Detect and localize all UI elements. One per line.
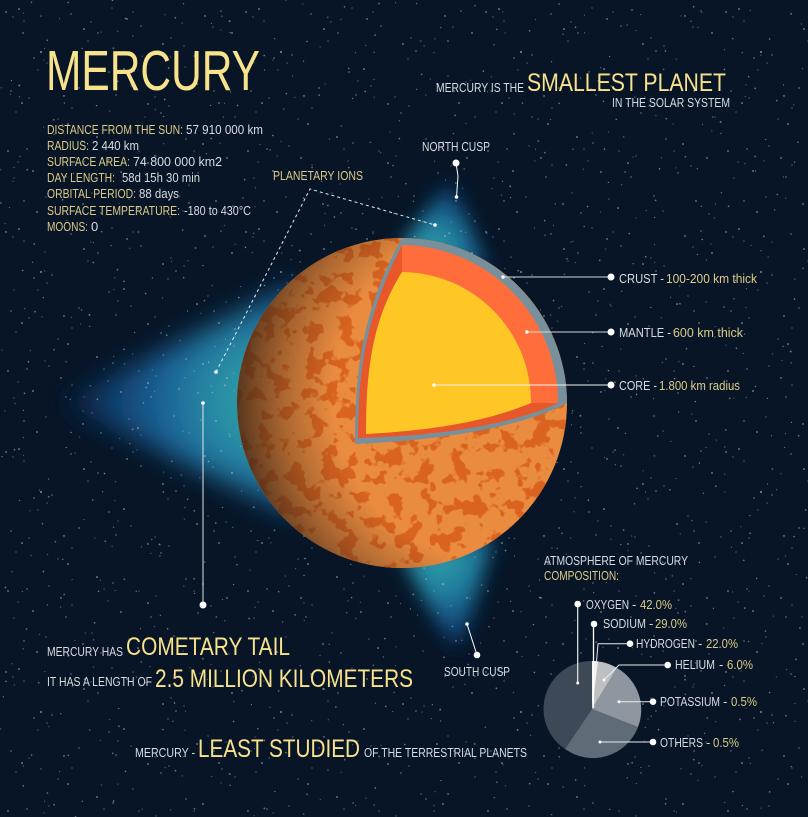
planetary ion glow: left bbox=[60, 282, 300, 518]
helium label: - bbox=[719, 657, 723, 672]
atmosphere heading: COMPOSITION: bbox=[544, 568, 619, 583]
surface area bbox=[47, 154, 222, 169]
radius: RADIUS: bbox=[47, 138, 89, 153]
helium leader bbox=[602, 662, 671, 682]
others leader bbox=[598, 739, 656, 745]
surface area: SURFACE AREA: bbox=[47, 154, 130, 169]
atmosphere heading bbox=[544, 553, 688, 583]
north cusp pointer bbox=[452, 160, 460, 199]
slice: hydrogen bbox=[592, 668, 641, 727]
helium label: 6.0% bbox=[727, 657, 753, 672]
hydrogen label: 22.0% bbox=[706, 636, 738, 651]
crust label: CRUST - bbox=[619, 271, 664, 286]
distance: 57 910 000 km bbox=[186, 122, 263, 137]
headline: smallest planet: MERCURY IS THE bbox=[436, 80, 524, 95]
moons: 0 bbox=[91, 219, 98, 234]
planetary ion glow: top bbox=[398, 178, 490, 272]
hydrogen leader bbox=[596, 640, 633, 668]
core label: CORE - bbox=[619, 378, 657, 393]
oxygen label: OXYGEN bbox=[586, 597, 629, 612]
helium label: HELIUM bbox=[675, 657, 715, 672]
others label: - bbox=[706, 735, 710, 750]
headline: smallest planet: SMALLEST PLANET bbox=[527, 69, 726, 97]
day length bbox=[47, 170, 200, 185]
others label: OTHERS bbox=[660, 735, 703, 750]
others label bbox=[660, 735, 739, 750]
least studied headline: LEAST STUDIED bbox=[198, 735, 360, 763]
oxygen label: 42.0% bbox=[640, 597, 672, 612]
planetary ion glow: bottom bbox=[400, 535, 495, 660]
helium label bbox=[675, 657, 753, 672]
potassium label: POTASSIUM bbox=[660, 694, 720, 709]
headline: smallest planet bbox=[436, 69, 730, 110]
mantle label: 600 km thick bbox=[673, 325, 743, 340]
core label bbox=[619, 378, 740, 393]
headline: smallest planet: IN THE SOLAR SYSTEM bbox=[612, 96, 730, 110]
crust pointer bbox=[501, 274, 614, 280]
distance: DISTANCE FROM THE SUN: bbox=[47, 122, 183, 137]
slice: trace gas sliver bbox=[592, 661, 598, 709]
radius: 2 440 km bbox=[92, 138, 139, 153]
others label: 0.5% bbox=[713, 735, 739, 750]
south cusp label: SOUTH CUSP bbox=[444, 664, 510, 679]
surface pattern bbox=[237, 238, 567, 568]
core pointer bbox=[432, 382, 614, 388]
sodium label: - bbox=[649, 616, 653, 631]
potassium label: - bbox=[723, 694, 727, 709]
comet tail headline: MERCURY HAS bbox=[47, 644, 123, 659]
oxygen label bbox=[586, 597, 672, 612]
surface temperature: -180 to 430°C bbox=[184, 203, 251, 218]
sodium leader bbox=[591, 621, 597, 708]
mantle label: MANTLE - bbox=[619, 325, 671, 340]
moons: MOONS: bbox=[47, 219, 88, 234]
planet shading bbox=[237, 238, 567, 568]
cutaway: mantle bbox=[402, 245, 558, 403]
north cusp label: NORTH CUSP bbox=[422, 139, 490, 154]
crust label: 100-200 km thick bbox=[666, 271, 757, 286]
orbital period: ORBITAL PERIOD: bbox=[47, 186, 136, 201]
sodium label: SODIUM bbox=[603, 616, 646, 631]
slice: helium bbox=[592, 661, 617, 709]
comet tail pointer bbox=[200, 401, 206, 608]
atmosphere heading: ATMOSPHERE OF MERCURY bbox=[544, 553, 688, 568]
least studied headline bbox=[135, 735, 527, 763]
radius bbox=[47, 138, 139, 153]
title: MERCURY bbox=[46, 39, 260, 103]
least studied headline: MERCURY - bbox=[135, 745, 195, 760]
sodium label: 29.0% bbox=[655, 616, 687, 631]
planet bbox=[237, 238, 567, 568]
potassium leader bbox=[618, 698, 656, 705]
hydrogen label: - bbox=[698, 636, 702, 651]
comet tail headline: IT HAS A LENGTH OF bbox=[47, 674, 152, 689]
cutaway: core bbox=[366, 272, 531, 434]
oxygen label: - bbox=[632, 597, 636, 612]
core label: 1.800 km radius bbox=[659, 378, 740, 393]
mantle pointer bbox=[525, 328, 614, 336]
orbital period: 88 days bbox=[139, 186, 179, 201]
sodium label bbox=[603, 616, 687, 631]
slice: sodium bbox=[565, 709, 638, 758]
crust label bbox=[619, 271, 757, 286]
planet facts bbox=[47, 122, 263, 234]
day length: DAY LENGTH: bbox=[47, 170, 115, 185]
cutaway: crust bbox=[355, 238, 567, 444]
comet tail headline: COMETARY TAIL bbox=[126, 633, 290, 661]
south cusp pointer bbox=[465, 622, 480, 658]
comet tail headline bbox=[47, 633, 413, 693]
atmosphere pie chart bbox=[544, 661, 641, 758]
cutaway: mantle shadow bbox=[358, 245, 558, 438]
potassium label: 0.5% bbox=[731, 694, 757, 709]
surface area: 74 800 000 km2 bbox=[133, 154, 222, 169]
hydrogen label: HYDROGEN bbox=[636, 636, 695, 651]
day length: 58d 15h 30 min bbox=[122, 170, 200, 185]
planetary ions pointer bbox=[214, 189, 437, 374]
slice: oxygen bbox=[544, 661, 592, 749]
least studied headline: OF THE TERRESTRIAL PLANETS bbox=[364, 745, 527, 760]
mantle label bbox=[619, 325, 743, 340]
surface temperature: SURFACE TEMPERATURE: bbox=[47, 203, 180, 218]
oxygen leader bbox=[574, 601, 581, 684]
planetary ions label: PLANETARY IONS bbox=[273, 168, 363, 183]
comet tail headline: 2.5 MILLION KILOMETERS bbox=[155, 665, 413, 693]
